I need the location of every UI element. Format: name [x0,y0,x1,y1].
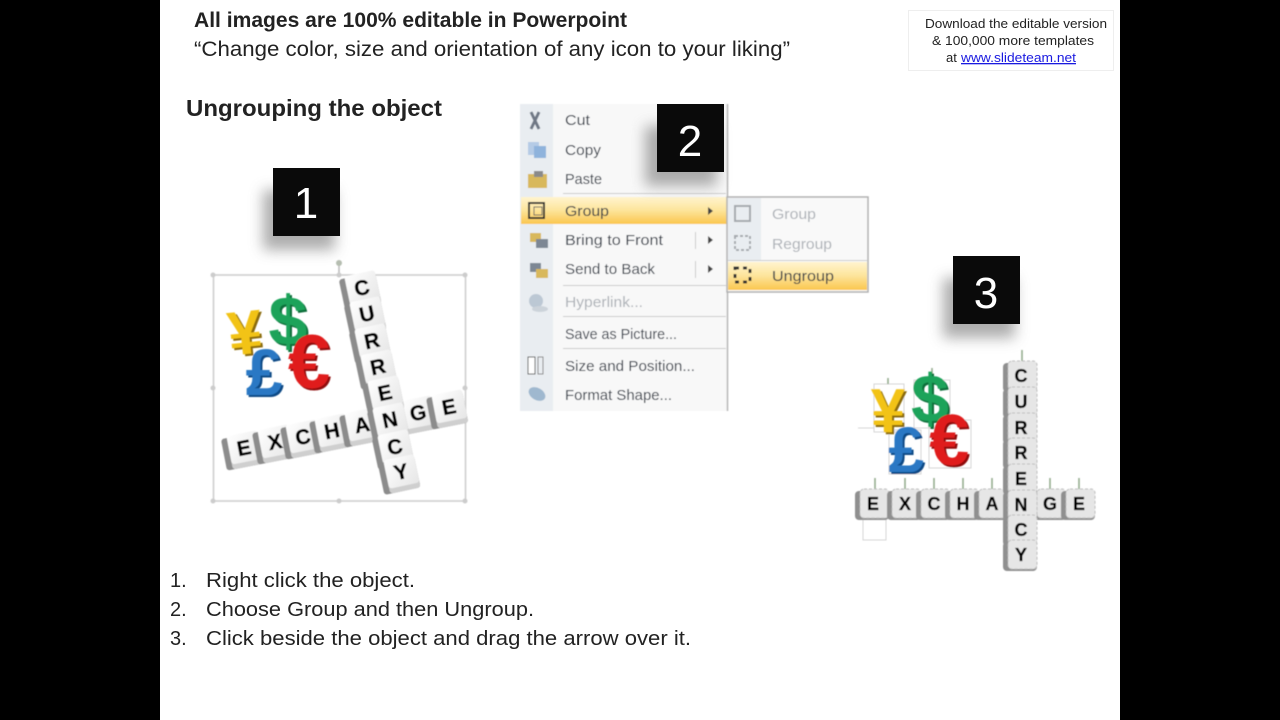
tiles: EXCHANGE: E [235,436,253,461]
tiles: EXCHANGE: E [440,395,458,420]
tiles: EXCHANGE: H [322,419,342,444]
download callout: Download the editable version [925,16,1107,31]
tiles: CURRENCY: N [1014,495,1028,515]
submenu [727,197,868,292]
tiles: EXCHANGE: C [293,425,313,450]
download callout: & 100,000 more templates [932,33,1095,48]
step badge 2: 2 [678,117,702,166]
step badge 1: 1 [294,179,318,228]
instruction list: Choose Group and then Ungroup. [206,599,534,621]
instruction list: 3. [170,628,187,650]
download callout [908,10,1114,70]
step badge 3 [943,256,1020,338]
currency symbols: £ [246,335,283,409]
menu separators [563,194,726,348]
currency symbols: € [288,320,330,405]
menu labels: Paste [565,171,602,188]
instruction list: Click beside the object and drag the arrow over it. [206,628,691,650]
tiles: CURRENCY: U [1014,392,1028,412]
download callout: at [946,50,957,65]
tiles: CURRENCY [1003,361,1037,571]
tiles: CURRENCY: E [376,381,394,406]
currency symbols: ¥ [227,299,269,372]
currency symbols: € [290,322,332,407]
currency symbols: $ [913,363,951,439]
tiles: CURRENCY: C [385,435,405,460]
instruction list [170,570,691,650]
menu labels [565,112,695,404]
menu labels: Hyperlink... [565,294,643,311]
submenu: Ungroup [772,268,834,285]
currency symbols: ¥ [871,377,906,446]
menu labels: Cut [565,112,591,129]
menu labels: Size and Position... [565,358,695,375]
selection handles [858,350,1079,540]
currency symbols: £ [888,414,924,486]
section heading: Ungrouping the object [186,95,442,121]
tiles: EXCHANGE: H [956,494,970,514]
selection frame [210,260,468,504]
instruction list: Right click the object. [206,570,415,592]
currency symbols: $ [911,361,949,437]
heading: editable images: All images are 100% editable in Powerpoint [194,9,627,32]
tiles: CURRENCY: C [1014,520,1028,540]
tiles: EXCHANGE: G [408,401,428,426]
tiles: EXCHANGE: E [1073,494,1085,514]
tiles: EXCHANGE: G [1043,494,1057,514]
menu labels: Save as Picture... [565,326,677,343]
download callout: www.slideteam.net [960,50,1076,65]
tiles: CURRENCY [338,270,421,495]
menu labels: Send to Back [565,261,655,278]
tiles: CURRENCY: U [357,302,377,327]
tiles: CURRENCY: E [1015,469,1027,489]
currency symbols: € [929,401,969,481]
slide background [160,0,1120,720]
instruction list: 2. [170,599,187,621]
tiles: CURRENCY: N [380,408,400,433]
object 1: selected group [210,260,468,504]
context menu [520,104,868,411]
tiles: EXCHANGE: A [986,494,998,514]
tiles: CURRENCY: R [362,329,382,354]
currency symbols [224,282,332,411]
submenu: Regroup [772,236,832,253]
step badge 1 [263,168,340,250]
menu icons [526,112,548,404]
currency symbols: $ [271,284,309,362]
tiles: CURRENCY: R [1014,443,1028,463]
submenu: Group [772,206,816,223]
instruction list: 1. [170,570,187,592]
tiles: EXCHANGE: X [899,494,911,514]
heading: editable images [194,9,790,61]
tiles: CURRENCY: R [1014,418,1028,438]
currency symbols: € [931,403,971,483]
step badge 3: 3 [974,269,998,318]
tiles: CURRENCY: C [352,276,372,301]
currency symbols: ¥ [224,297,266,370]
menu panel [520,104,728,411]
tiles: CURRENCY: Y [392,460,410,485]
tiles: EXCHANGE: X [266,430,284,455]
tiles: EXCHANGE: E [867,494,879,514]
menu labels: Group [565,203,609,220]
tiles: EXCHANGE [855,489,1095,520]
menu labels: Copy [565,142,601,159]
currency symbols: $ [269,282,307,360]
submenu arrows [708,207,713,273]
tiles: EXCHANGE [221,389,468,471]
tiles: CURRENCY: Y [1015,545,1027,565]
tiles: EXCHANGE: A [352,413,372,438]
tiles: EXCHANGE: C [928,494,940,514]
currency symbols: £ [890,416,926,488]
currency symbols: ¥ [873,379,908,448]
menu labels: Format Shape... [565,387,672,404]
currency symbols: £ [248,337,285,411]
heading: editable images: “Change color, size and orientation of any icon to your liking” [194,38,790,61]
tiles: CURRENCY: R [368,355,388,380]
highlighted row: Group [521,197,727,224]
object 3: ungrouped [855,350,1095,571]
tiles: CURRENCY: C [1014,366,1028,386]
menu labels: Bring to Front [565,232,664,249]
currency symbols [871,361,971,488]
step badge 2 [645,104,724,186]
